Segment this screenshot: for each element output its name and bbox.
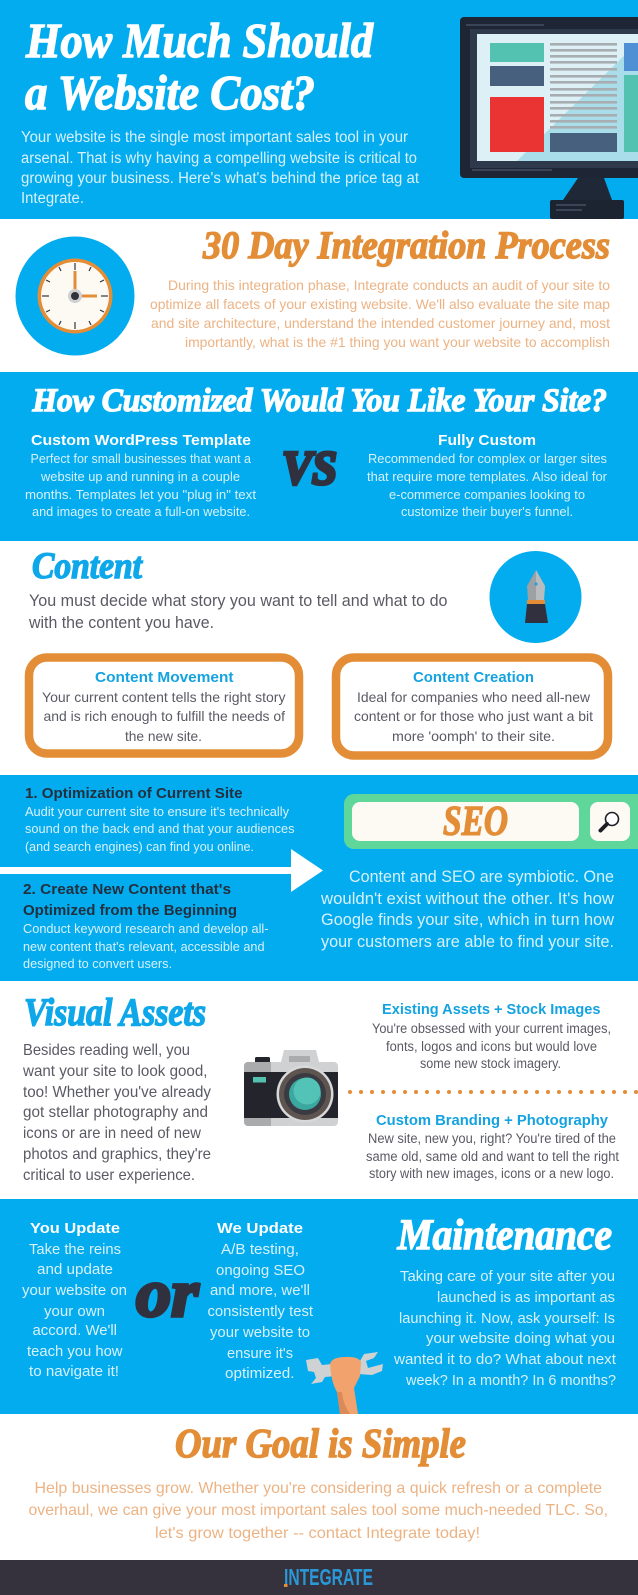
column: we update: your website to: [210, 1324, 310, 1341]
column: you update: Take the reins: [29, 1241, 121, 1258]
text: existing assets: fonts, logos and icons but would love: [386, 1039, 597, 1054]
text: goal body: let's grow together -- contact Integrate today!: [155, 1525, 480, 1542]
text: integration description: and site architecture, understand the intended customer journey and, most: [151, 315, 610, 331]
column: custom wordpress template: website up and running in a couple: [40, 469, 240, 484]
text: maintenance body: wanted it to do? What about next: [393, 1351, 617, 1368]
card: content creation: more 'oomph' to their site.: [392, 728, 555, 744]
heading: 30 day integration process: 30 Day Integration Process: [202, 224, 610, 267]
arrow: [0, 849, 323, 892]
card: content creation: Ideal for companies who need all-new: [357, 689, 591, 705]
text: custom branding: story with new images, icons or a new logo.: [369, 1166, 614, 1181]
intro text: [21, 129, 420, 207]
text: content intro: [28, 591, 447, 632]
icon: computer monitor: [460, 17, 638, 219]
title: a Website Cost?: [25, 65, 315, 120]
text: create new content: Optimized from the Beginning: [23, 903, 237, 919]
column: custom wordpress template: [25, 432, 256, 519]
heading: maintenance: Maintenance: [397, 1212, 612, 1259]
text: create new content: 2. Create New Content that's: [23, 882, 231, 898]
icon: magnifying glass: [600, 812, 618, 830]
panel: 30 day integration process: [16, 224, 610, 356]
column: custom wordpress template: Custom WordPress Template: [31, 432, 251, 449]
text: maintenance body: week? In a month? In 6 months?: [405, 1372, 616, 1389]
text: visual assets body: want your site to look good,: [22, 1063, 208, 1080]
column: we update: optimized.: [225, 1365, 294, 1382]
column: fully custom: Recommended for complex or larger sites: [368, 451, 607, 466]
column: fully custom: e-commerce companies looking to: [389, 487, 585, 502]
column: fully custom: Fully Custom: [438, 432, 536, 449]
text: custom branding: Custom Branding + Photography: [376, 1113, 608, 1129]
logo: integrate: INTEGRATE: [284, 1564, 373, 1590]
card: content movement: [29, 658, 299, 754]
intro text: growing your business. Here's what's behind the price tag at: [21, 170, 420, 187]
text: existing assets: You're obsessed with your current images,: [372, 1021, 611, 1036]
heading: how customized: How Customized Would You Like Your Site?: [32, 383, 607, 419]
text: maintenance body: launched is as important as: [437, 1289, 615, 1306]
text: visual assets body: photos and graphics, they're: [23, 1146, 211, 1163]
text: optimization of current site: [25, 786, 295, 854]
text: content and seo: your customers are able to find your site.: [321, 932, 614, 951]
text: visual assets body: icons or are in need of new: [23, 1125, 201, 1142]
text: integration description: optimize all facets of your existing website. We'll also evaluate the site map: [150, 296, 610, 312]
intro text: Your website is the single most important sales tool in your: [21, 129, 408, 146]
text: content and seo: Content and SEO are symbiotic. One: [349, 867, 614, 886]
column: we update: [208, 1220, 314, 1382]
column: you update: You Update: [30, 1220, 120, 1237]
text: maintenance body: your website doing what you: [426, 1330, 615, 1347]
text: vs: VS: [282, 442, 337, 495]
column: custom wordpress template: and images to create a full-on website.: [32, 504, 250, 519]
panel: visual assets: [22, 991, 638, 1184]
text: create new content: Conduct keyword research and develop all-: [23, 921, 268, 936]
icon: fountain pen: [490, 551, 582, 643]
text: existing assets: [372, 1002, 611, 1071]
text: custom branding: same old, same old and want to tell the right: [366, 1149, 619, 1164]
text: visual assets body: too! Whether you've already: [23, 1084, 211, 1101]
column: custom wordpress template: months. Templates let you "plug in" text: [25, 487, 256, 502]
card: content movement: the new site.: [125, 728, 202, 744]
text: create new content: designed to convert users.: [23, 956, 172, 971]
panel: header: [0, 0, 638, 219]
panel: content: [28, 546, 608, 756]
text: create new content: new content that's relevant, accessible and: [23, 939, 264, 954]
text: integration description: importantly, what is the #1 thing you want your website to accomplish: [185, 334, 610, 350]
column: you update: accord. We'll: [32, 1322, 117, 1339]
icon: hand holding wrench: [306, 1352, 383, 1414]
text: maintenance body: Taking care of your site after you: [400, 1268, 615, 1285]
text: visual assets body: critical to user experience.: [23, 1167, 195, 1184]
card: content movement: Your current content tells the right story: [42, 689, 286, 705]
text: optimization of current site: Audit your current site to ensure it's technically: [25, 804, 289, 819]
intro text: arsenal. That is why having a compelling website is critical to: [21, 150, 417, 167]
column: we update: A/B testing,: [221, 1241, 299, 1258]
text: goal body: Help businesses grow. Whether you're considering a quick refresh or a complete: [34, 1480, 602, 1497]
text: existing assets: Existing Assets + Stock Images: [382, 1002, 600, 1018]
text: integration description: [150, 277, 610, 350]
panel: maintenance: [0, 1199, 638, 1414]
text: optimization of current site: (and search engines) can find you online.: [25, 839, 254, 854]
column: custom wordpress template: Perfect for small businesses that want a: [30, 451, 252, 466]
heading: our goal is simple: Our Goal is Simple: [175, 1420, 466, 1466]
card: content movement: and is rich enough to fulfill the needs of: [44, 708, 285, 724]
text: optimization of current site: 1. Optimization of Current Site: [25, 786, 242, 802]
icon: clock: [16, 236, 134, 356]
panel: seo: [0, 775, 638, 981]
text: goal body: [28, 1480, 608, 1542]
text: content and seo: Google finds your site, which in turn how: [321, 910, 615, 929]
text: goal body: overhaul, we can give your most important sales tool some much-needed TLC. So,: [28, 1502, 608, 1519]
text: content intro: with the content you have.: [28, 613, 214, 632]
heading: content: Content: [32, 546, 144, 587]
column: we update: and more, we'll: [210, 1282, 310, 1299]
column: we update: We Update: [217, 1220, 303, 1237]
text: custom branding: New site, new you, right? You're tired of the: [368, 1131, 616, 1146]
text: content and seo: wouldn't exist without the other. It's how: [320, 889, 615, 908]
search bar: seo: [344, 794, 638, 849]
column: fully custom: that require more templates. Also ideal for: [367, 469, 608, 484]
text: content and seo: [320, 867, 615, 951]
text: existing assets: some new stock imagery.: [420, 1056, 561, 1071]
column: you update: your own: [44, 1303, 105, 1320]
text: visual assets body: Besides reading well, you: [23, 1042, 190, 1059]
column: we update: ongoing SEO: [216, 1262, 305, 1279]
column: you update: to navigate it!: [29, 1363, 119, 1380]
column: you update: teach you how: [27, 1343, 123, 1360]
search bar: seo: SEO: [443, 799, 508, 845]
text: content intro: You must decide what story you want to tell and what to do: [29, 591, 448, 610]
column: we update: consistently test: [208, 1303, 314, 1320]
text: create new content: [23, 882, 268, 971]
column: fully custom: customize their buyer's funnel.: [401, 504, 573, 519]
icon: camera: [244, 1050, 338, 1126]
text: or: or: [136, 1255, 199, 1331]
title: How Much Should: [25, 13, 374, 68]
title: [25, 13, 374, 120]
card: content creation: content or for those who just want a bit: [354, 708, 593, 724]
text: custom branding: [366, 1113, 619, 1181]
column: we update: ensure it's: [227, 1345, 293, 1362]
text: maintenance body: [393, 1268, 617, 1389]
panel: how customized: [0, 372, 638, 541]
text: maintenance body: launching it. Now, ask yourself: Is: [399, 1310, 615, 1327]
intro text: Integrate.: [21, 190, 84, 207]
column: fully custom: [367, 432, 608, 519]
column: you update: and update: [37, 1261, 113, 1278]
card: content creation: Content Creation: [413, 669, 534, 686]
text: optimization of current site: sound on the back end and that your audiences: [25, 821, 295, 836]
panel: our goal: [28, 1420, 608, 1542]
logo: integrate: [284, 1564, 373, 1590]
footer: [0, 1560, 638, 1595]
card: content movement: Content Movement: [95, 669, 234, 686]
card: content creation: [336, 658, 608, 756]
text: visual assets body: [22, 1042, 211, 1184]
text: integration description: During this integration phase, Integrate conducts an audit of your site to: [168, 277, 610, 293]
column: you update: your website on: [22, 1282, 127, 1299]
heading: visual assets: Visual Assets: [24, 991, 206, 1034]
column: you update: [22, 1220, 127, 1380]
text: visual assets body: got stellar photography and: [23, 1104, 208, 1121]
